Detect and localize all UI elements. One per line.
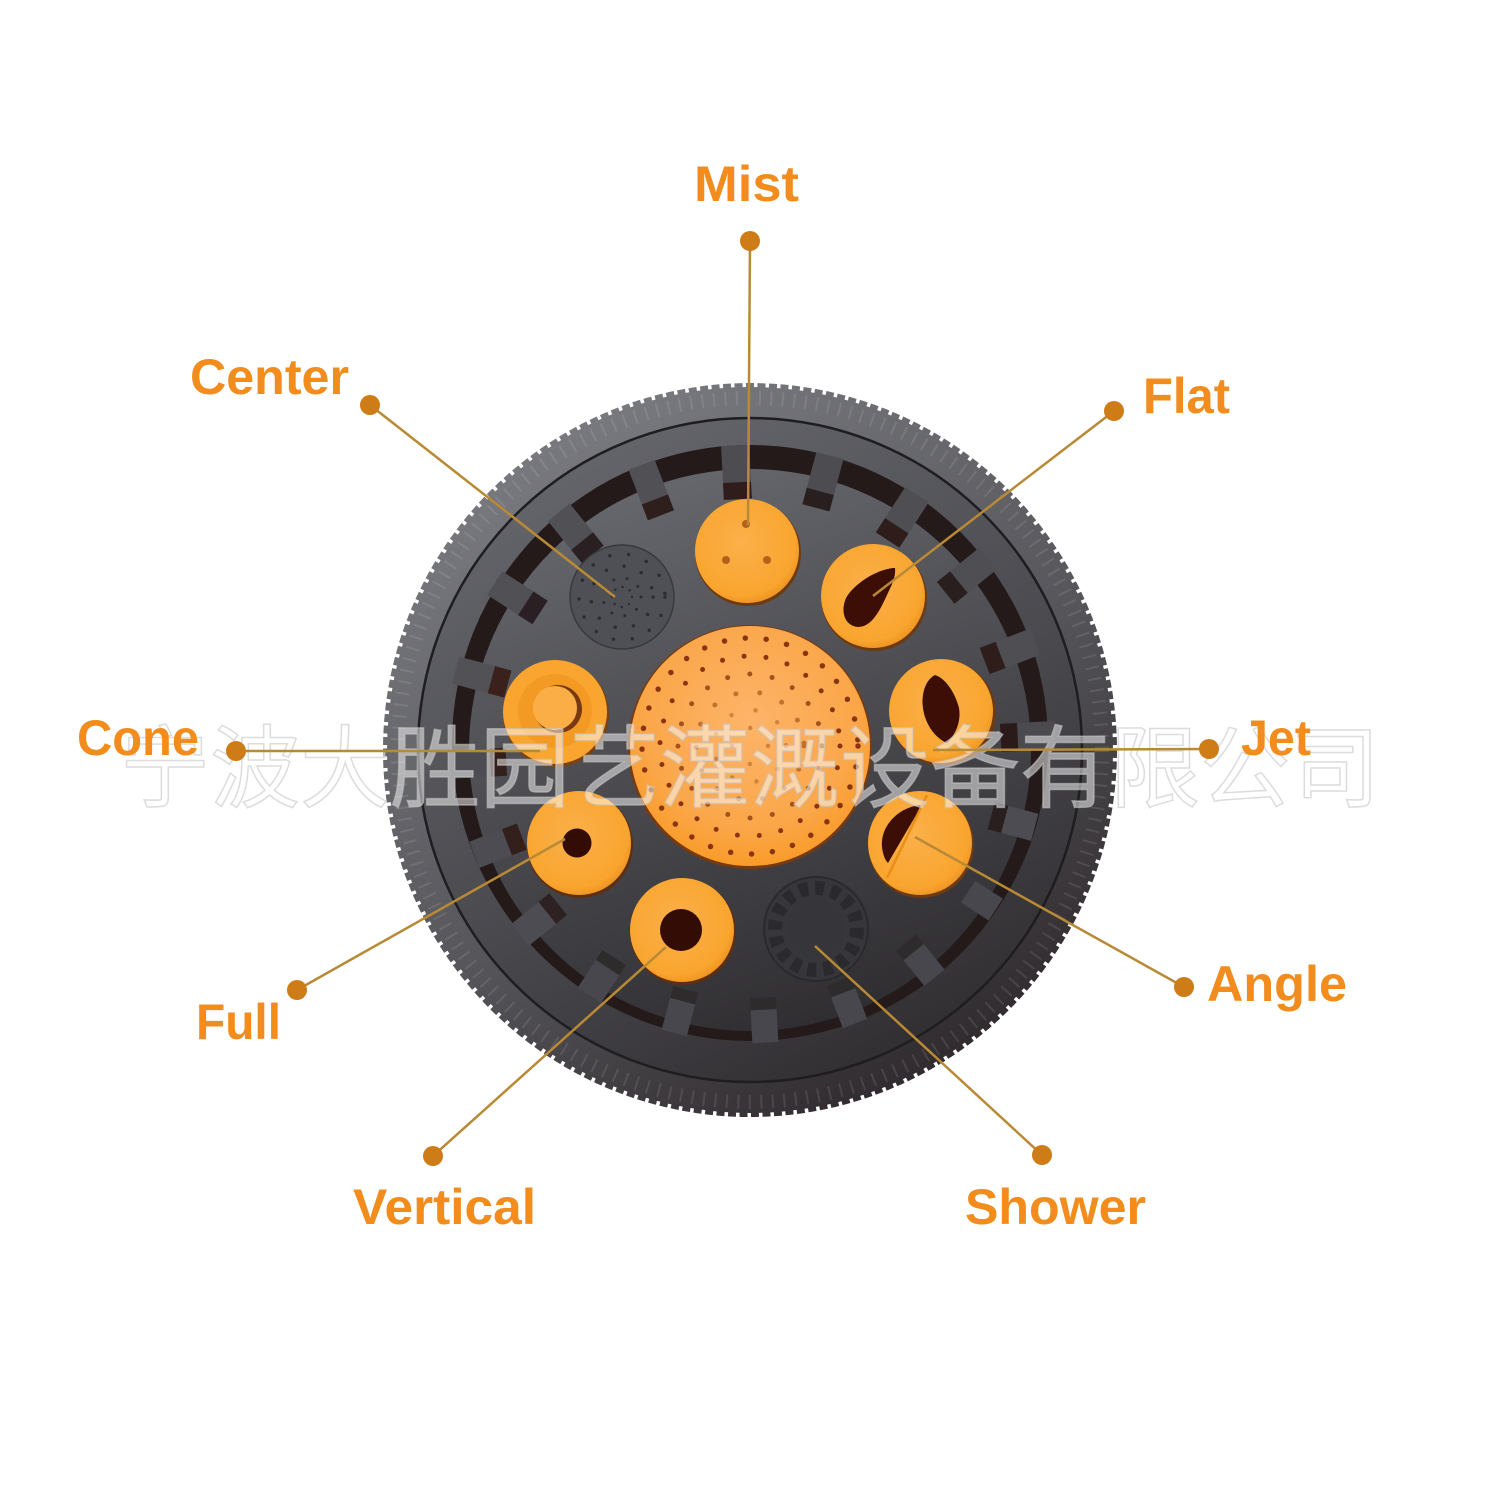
leader: angle — [915, 837, 1194, 997]
nozzle: center (grey) — [570, 545, 674, 649]
label: Angle: Angle — [1207, 956, 1347, 1012]
ratchet tabs — [450, 445, 1055, 1043]
watermark: 宁波大胜园艺灌溉设备有限公司 — [120, 720, 1380, 820]
leader: shower — [815, 946, 1052, 1165]
label: Full: Full — [196, 994, 281, 1050]
nozzle: flat — [821, 544, 927, 651]
leader: cone — [226, 741, 540, 761]
label: Jet: Jet — [1241, 710, 1311, 766]
nozzle: cone — [503, 660, 609, 767]
nozzle: full — [527, 791, 633, 898]
leader: vertical — [423, 947, 666, 1166]
label: Shower: Shower — [965, 1179, 1146, 1235]
nozzle: angle — [868, 791, 974, 898]
leader: full — [287, 839, 565, 1000]
leader: jet — [933, 739, 1219, 759]
label: Center: Center — [190, 349, 349, 405]
nozzle: shower (dark) — [764, 877, 868, 981]
dial body — [386, 386, 1114, 1114]
label: Vertical: Vertical — [353, 1179, 536, 1235]
label: Cone: Cone — [77, 710, 199, 766]
leader: mist — [740, 231, 760, 525]
nozzle: vertical — [630, 878, 736, 985]
label: Mist: Mist — [694, 156, 799, 212]
leader: center — [360, 395, 615, 597]
leader: flat — [873, 401, 1124, 596]
nozzle: mist — [695, 499, 801, 606]
nozzle: jet — [889, 659, 996, 766]
label: Flat: Flat — [1143, 368, 1230, 424]
central shower rose — [628, 625, 872, 869]
